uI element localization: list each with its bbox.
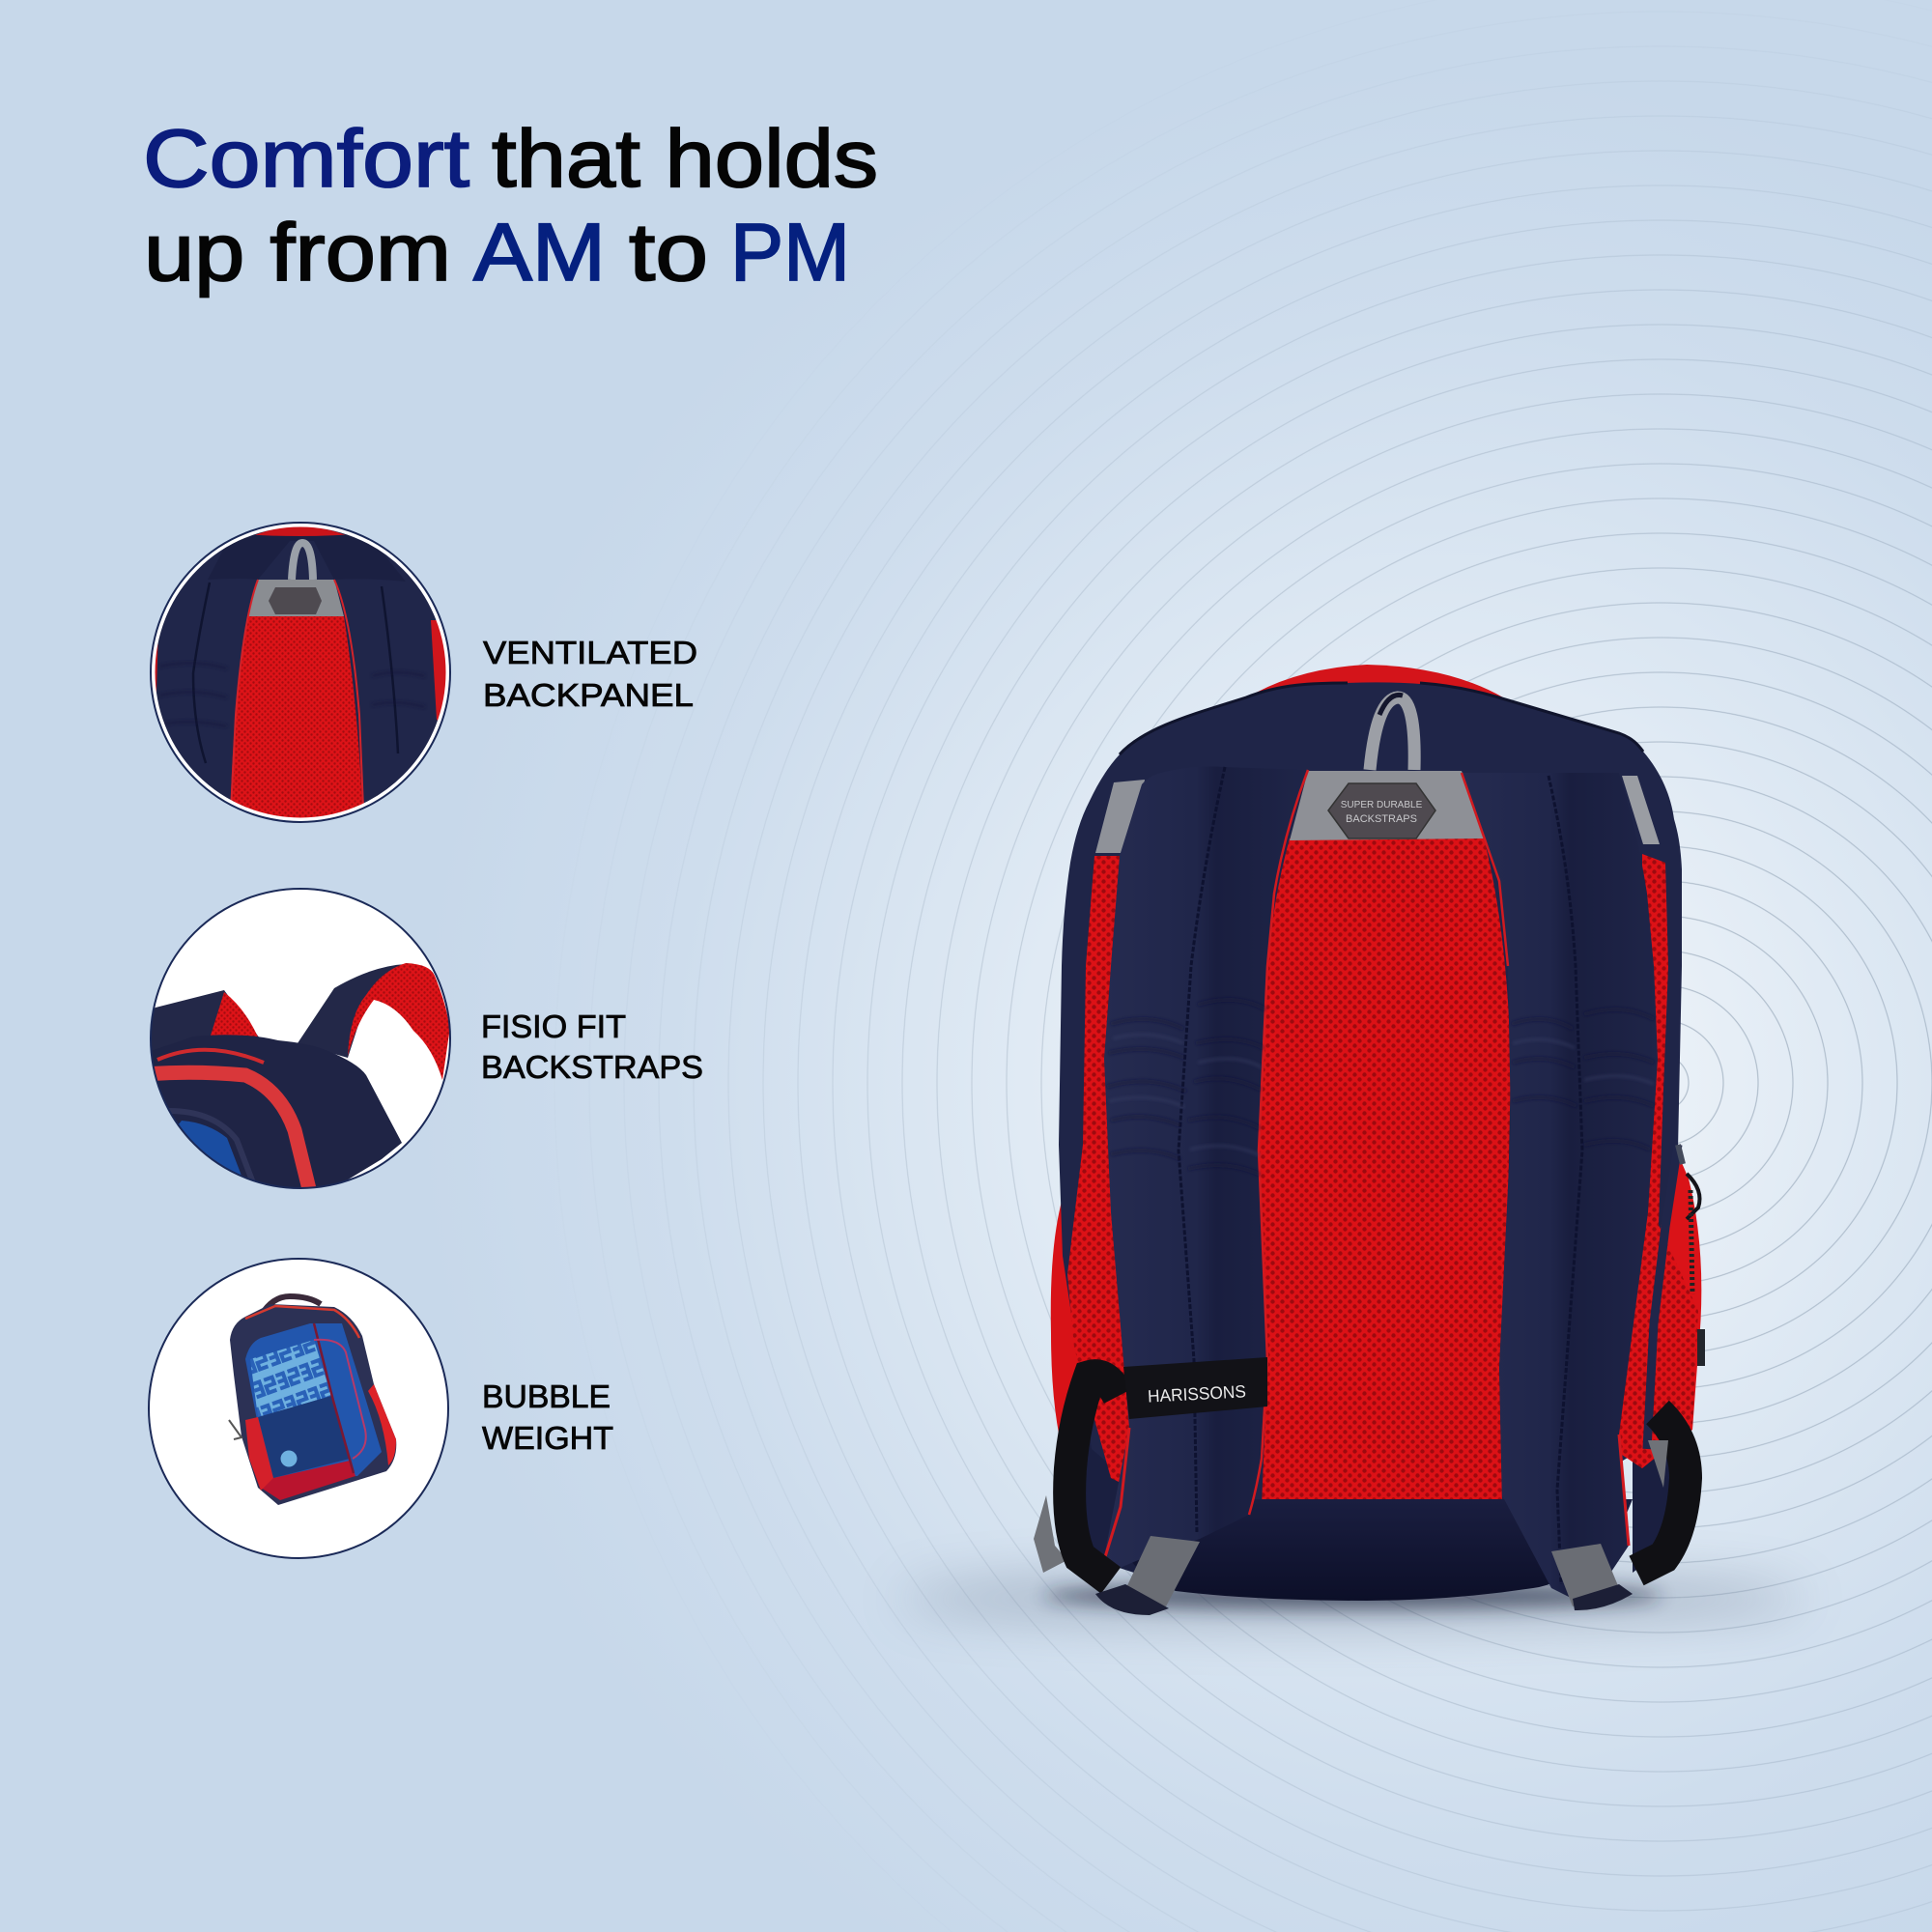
- title: Comfort: [143, 113, 469, 204]
- label: ventilated backpanel: BACKPANEL: [483, 677, 694, 713]
- black right webbing loop: [1636, 1412, 1686, 1571]
- ground shadow: [898, 1574, 1806, 1624]
- left buckle: [1095, 1584, 1169, 1615]
- concentric rings background: [659, 81, 1932, 1932]
- title: AM: [473, 207, 606, 298]
- top red mesh arc: [1244, 665, 1503, 699]
- label: bubble weight: WEIGHT: [482, 1420, 613, 1456]
- side mesh panels: [1067, 856, 1140, 1492]
- circle photo: back panel closeup: [145, 522, 454, 831]
- gray side webbing: [1095, 780, 1145, 853]
- gray inner strap on right loop: [1648, 1440, 1668, 1488]
- right gray tab: [1551, 1544, 1619, 1606]
- label: fisio fit backstraps: BACKSTRAPS: [481, 1049, 703, 1085]
- title: up from: [144, 207, 451, 298]
- left shoulder strap: [1104, 767, 1308, 1575]
- circle photo: backstraps closeup: [145, 889, 450, 1198]
- label: fisio fit backstraps: [481, 1009, 703, 1085]
- black left webbing loop: [1069, 1376, 1119, 1580]
- right shoulder strap: [1462, 773, 1658, 1606]
- label: bubble weight: [482, 1378, 613, 1456]
- central red mesh: [1259, 838, 1511, 1507]
- label: ventilated backpanel: [483, 635, 697, 713]
- feature: bubble weight: [149, 1259, 613, 1558]
- navy body: [1059, 682, 1682, 1507]
- title: to: [629, 207, 708, 298]
- title: PM: [730, 207, 850, 298]
- bottom navy panel: [1121, 1499, 1633, 1601]
- left gray tab: [1123, 1536, 1200, 1606]
- strap label: Harissons: [1123, 1357, 1267, 1419]
- feature: ventilated backpanel: [145, 522, 697, 831]
- badge: [269, 587, 322, 614]
- circle photo: front of backpack: [149, 1259, 448, 1558]
- strap label: Harissons: HARISSONS: [1147, 1381, 1246, 1406]
- badge: super durable backstraps: [1328, 783, 1435, 838]
- feature: fisio fit backstraps: [145, 889, 703, 1198]
- label: fisio fit backstraps: FISIO FIT: [481, 1009, 626, 1044]
- gray webbing with badge: [1290, 771, 1484, 840]
- right buckle: [1573, 1584, 1633, 1610]
- side red pockets: [1051, 1198, 1140, 1488]
- badge: super durable backstraps: SUPER DURABLE: [1341, 800, 1423, 810]
- badge: super durable backstraps: BACKSTRAPS: [1346, 813, 1417, 825]
- title: [143, 113, 878, 298]
- label: bubble weight: BUBBLE: [482, 1378, 611, 1414]
- navy fill inside webbing loops: [1082, 1430, 1676, 1575]
- title: that holds: [492, 113, 878, 204]
- gray left webbing: [1034, 1495, 1067, 1573]
- main backpack back view: [1034, 665, 1705, 1615]
- label: ventilated backpanel: VENTILATED: [483, 635, 697, 670]
- zipper pulls: [1678, 1145, 1705, 1366]
- gray hanging loop: [1370, 697, 1414, 770]
